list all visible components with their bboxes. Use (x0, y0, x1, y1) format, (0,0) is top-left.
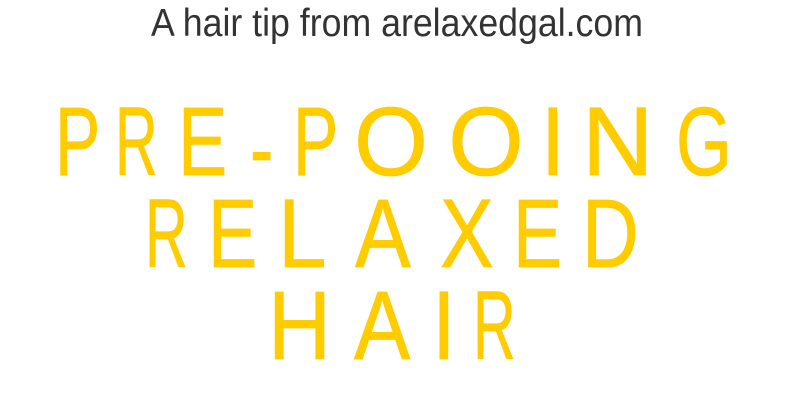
title line 1: PRE-POOING: N (582, 87, 654, 196)
title line 3: HAIR: H (268, 271, 331, 380)
title line 2: RELAXED: E (513, 179, 562, 288)
title line 1: PRE-POOING: P (55, 87, 100, 196)
title line 2: RELAXED: X (440, 179, 494, 288)
title line 2: RELAXED: L (278, 179, 327, 288)
title line 1: PRE-POOING: E (178, 87, 227, 196)
title line 2: RELAXED: R (145, 179, 188, 288)
title line 1: PRE-POOING (55, 87, 731, 203)
title line 2: RELAXED (145, 179, 639, 288)
title line 1: PRE-POOING: I (541, 87, 565, 196)
title line 3: HAIR: A (354, 271, 410, 380)
subtitle: A hair tip from arelaxedgal.com: A hair tip from arelaxedgal.com (151, 2, 643, 45)
title line 1: PRE-POOING: G (676, 87, 731, 196)
title line 1: PRE-POOING: P (293, 87, 338, 196)
title line 1: PRE-POOING: O (354, 87, 428, 196)
title line 1: PRE-POOING: O (448, 87, 524, 196)
title line 1: PRE-POOING: R (115, 87, 158, 196)
title line 2: RELAXED: D (582, 179, 639, 288)
title line 2: RELAXED: E (208, 179, 257, 288)
title line 3: HAIR: R (473, 271, 516, 380)
title line 3: HAIR (268, 271, 516, 380)
title line 2: RELAXED: A (355, 179, 410, 288)
title line 3: HAIR: I (432, 271, 456, 380)
title line 1: PRE-POOING: - (250, 94, 273, 203)
